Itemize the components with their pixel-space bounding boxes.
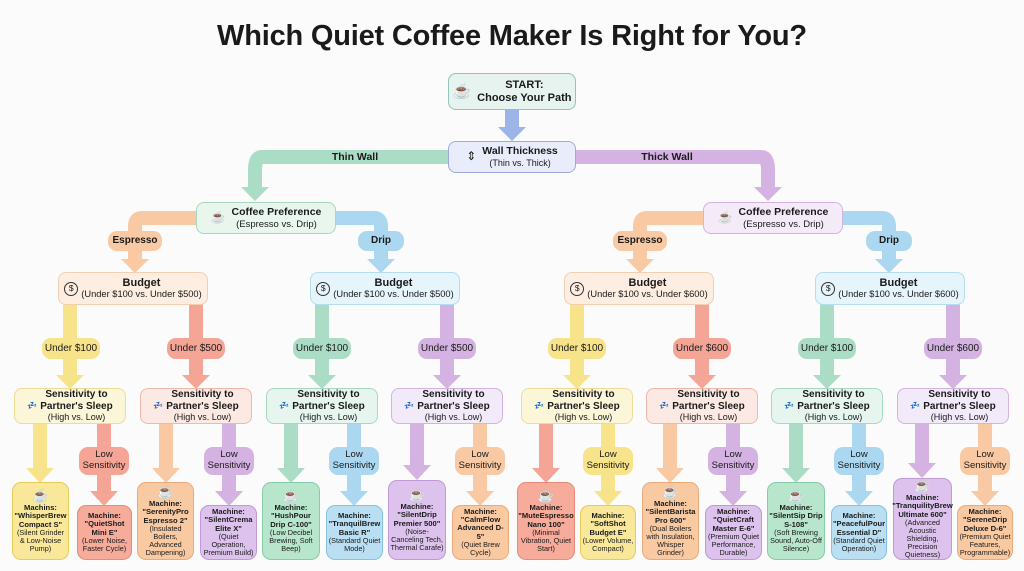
budget box 4: Budget — [880, 277, 917, 289]
sensitivity boxes: 💤 — [279, 401, 289, 410]
machine cards: (Quiet Operation, Premium Build) — [204, 532, 253, 557]
machine cards: "MuteEspresso Nano 100" — [518, 511, 574, 529]
low sensitivity pills: Sensitivity — [83, 460, 125, 471]
sensitivity boxes: Sensitivity to — [171, 389, 234, 400]
coffee preference right — [703, 202, 843, 234]
machine cards — [12, 478, 1013, 560]
machine cards: "SoftShot Budget E" — [590, 519, 626, 537]
pill: drip right: Drip — [879, 235, 899, 246]
sensitivity boxes: Sensitivity to — [422, 389, 485, 400]
machine cards: Machine: — [717, 507, 750, 516]
low sensitivity pills: Sensitivity — [208, 460, 250, 471]
pill: drip left — [358, 231, 404, 251]
machine cards: (Low Decibel Brewing, Soft Beep) — [269, 528, 313, 553]
budget pills: Under $600 — [676, 343, 728, 354]
sensitivity boxes: (High vs. Low) — [931, 412, 988, 422]
sensitivity boxes: Sensitivity to — [928, 389, 991, 400]
budget box 1 — [58, 272, 208, 305]
low sensitivity pills: Low — [471, 449, 489, 460]
machine cards: (Premium Quiet Features, Programmable) — [959, 532, 1011, 557]
branch label: thin wall: Thin Wall — [332, 151, 378, 163]
machine cards: ☕ — [538, 488, 554, 503]
low sensitivity pills: Sensitivity — [587, 460, 629, 471]
sensitivity boxes: Partner's Sleep — [923, 401, 996, 412]
machine cards: (Standard Quiet Operation) — [833, 536, 885, 553]
sensitivity boxes: 💤 — [659, 401, 669, 410]
machine cards: Machine: — [149, 499, 182, 508]
budget pills: Under $100 — [296, 343, 348, 354]
machine cards: ☕ — [409, 487, 425, 502]
machine cards: "CalmFlow Advanced D-5" — [457, 515, 504, 541]
pill: espresso left — [108, 231, 162, 251]
coffee preference left — [196, 202, 336, 234]
budget box 4 — [815, 272, 965, 305]
low sensitivity pills: Sensitivity — [333, 460, 375, 471]
coffee preference right: ☕ — [718, 210, 733, 224]
start box: START: — [505, 79, 543, 91]
machine cards: (Lower Noise, Faster Cycle) — [82, 536, 127, 553]
machine cards: "HushPour Drip C-100" — [270, 511, 312, 529]
sensitivity boxes: Partner's Sleep — [292, 401, 365, 412]
machine cards: ☕ — [662, 484, 679, 499]
low sensitivity pills: Low — [599, 449, 617, 460]
machine cards: Machine: — [654, 499, 687, 508]
machine cards: "SerenityPro Espresso 2" — [142, 507, 189, 525]
machine cards: (Dual Boilers with Insulation, Whisper Grinder) — [646, 524, 695, 557]
sensitivity boxes: (High vs. Low) — [300, 412, 357, 422]
machine cards: Machins: — [24, 503, 57, 512]
sensitivity boxes: Sensitivity to — [677, 389, 740, 400]
pill: drip left: Drip — [371, 235, 391, 246]
sensitivity boxes: (High vs. Low) — [805, 412, 862, 422]
machine cards: (Standard Quiet Mode) — [329, 536, 380, 553]
machine cards: (Lower Volume, Compact) — [583, 536, 633, 553]
coffee preference left: (Espresso vs. Drip) — [236, 219, 317, 230]
machine cards: "SilentSip Drip S-108" — [769, 511, 823, 529]
title: Which Quiet Coffee Maker Is Right for You? — [217, 20, 807, 52]
sensitivity boxes: Sensitivity to — [552, 389, 615, 400]
budget box 2: (Under $100 vs. Under $500) — [333, 289, 454, 299]
budget box 3: $ — [575, 283, 580, 293]
machine cards: ☕ — [788, 488, 804, 503]
low sensitivity pills: Low — [976, 449, 994, 460]
budget box 1: $ — [69, 283, 74, 293]
low sensitivity pills: Low — [95, 449, 113, 460]
low sensitivity pills: Sensitivity — [459, 460, 501, 471]
machine cards: ☕ — [914, 478, 931, 493]
machine cards: (Quiet Brew Cycle) — [461, 540, 500, 557]
machine cards: (Soft Brewing Sound, Auto-Off Silence) — [770, 528, 822, 553]
pill: espresso left: Espresso — [112, 235, 158, 246]
budget pills — [42, 338, 982, 359]
low sensitivity pills: Sensitivity — [964, 460, 1006, 471]
machine cards: Machine: — [906, 493, 939, 502]
machine cards: Machine: — [464, 507, 497, 516]
budget box 4: (Under $100 vs. Under $600) — [838, 289, 959, 299]
sensitivity boxes: Partner's Sleep — [40, 401, 113, 412]
wall thickness box — [448, 141, 576, 173]
budget box 3 — [564, 272, 714, 305]
sensitivity boxes: 💤 — [153, 401, 163, 410]
start box: ☕ — [452, 83, 471, 100]
machine cards: Machine: — [401, 502, 433, 511]
sensitivity boxes: 💤 — [534, 401, 544, 410]
machine cards: Machine: — [338, 511, 371, 520]
budget box 3: Budget — [629, 277, 666, 289]
machine cards: ☕ — [157, 484, 174, 499]
machine cards: Machine: — [780, 503, 812, 512]
machine cards: ☕ — [32, 488, 49, 503]
sensitivity boxes: (High vs. Low) — [174, 412, 231, 422]
machine cards: "PeacefulPour Essential D" — [833, 519, 885, 537]
machine cards: Machine: — [530, 503, 562, 512]
machine cards: "SilentCrema Elite X" — [205, 515, 252, 533]
machine cards: "QuietShot Mini E" — [85, 519, 124, 537]
machine cards: (Minimal Vibration, Quiet Start) — [521, 528, 571, 553]
sensitivity boxes: Partner's Sleep — [547, 401, 620, 412]
sensitivity boxes: (High vs. Low) — [555, 412, 612, 422]
sensitivity boxes: Partner's Sleep — [797, 401, 870, 412]
machine cards: "SilentBarista Pro 600" — [645, 507, 696, 525]
start box: Choose Your Path — [477, 92, 572, 104]
coffee preference right: Coffee Preference — [739, 206, 828, 218]
wall thickness box: (Thin vs. Thick) — [489, 158, 551, 168]
budget box 3: (Under $100 vs. Under $600) — [587, 289, 708, 299]
budget box 1: (Under $100 vs. Under $500) — [81, 289, 202, 299]
budget pills: Under $100 — [551, 343, 603, 354]
machine cards: Machine: — [969, 507, 1001, 516]
coffee preference left: ☕ — [211, 210, 226, 224]
machine cards: "WhisperBrew Compact S" — [14, 511, 67, 529]
budget pills: Under $500 — [421, 343, 473, 354]
machine cards: "TranquilityBrew Ultimate 600" — [892, 501, 953, 519]
budget box 2 — [310, 272, 460, 305]
machine cards: (Silent Grinder & Low-Noise Pump) — [17, 528, 64, 553]
low sensitivity pills: Low — [345, 449, 363, 460]
machine cards: (Advanced Acoustic Shielding, Precision Quietness) — [905, 518, 940, 559]
budget pills: Under $100 — [801, 343, 853, 354]
budget box 2: $ — [321, 283, 326, 293]
sensitivity boxes: 💤 — [27, 401, 37, 410]
machine cards: "SereneDrip Deluxe D-6" — [963, 515, 1007, 533]
pill: drip right — [866, 231, 912, 251]
sensitivity boxes: Partner's Sleep — [417, 401, 490, 412]
coffee preference left: Coffee Preference — [232, 206, 321, 218]
sensitivity boxes: (High vs. Low) — [425, 412, 482, 422]
low sensitivity pills: Sensitivity — [838, 460, 880, 471]
low sensitivity pills: Low — [850, 449, 868, 460]
coffee preference right: (Espresso vs. Drip) — [743, 219, 824, 230]
budget box 4: $ — [826, 283, 831, 293]
machine cards: Machine: — [592, 511, 624, 520]
low sensitivity pills: Sensitivity — [712, 460, 754, 471]
machine cards: (Noise-Canceling Tech, Thermal Carafe) — [390, 527, 444, 552]
sensitivity boxes: Sensitivity to — [45, 389, 108, 400]
branch label: thick wall: Thick Wall — [641, 151, 693, 163]
machine cards: "SilentDrip Premier 500" — [394, 510, 440, 528]
low sensitivity pills: Low — [724, 449, 742, 460]
machine cards: Machine: — [843, 511, 875, 520]
machine cards: Machine: — [212, 507, 245, 516]
machine cards: (Premium Quiet Performance, Durable) — [708, 532, 759, 557]
machine cards: (Insulated Boilers, Advanced Dampening) — [146, 524, 185, 557]
machine cards: Machine: — [88, 511, 121, 520]
sensitivity boxes: (High vs. Low) — [680, 412, 737, 422]
budget pills: Under $600 — [927, 343, 979, 354]
low sensitivity pills — [79, 447, 1010, 475]
machine cards: Machine: — [275, 503, 307, 512]
sensitivity boxes: Partner's Sleep — [166, 401, 239, 412]
sensitivity boxes: Partner's Sleep — [672, 401, 745, 412]
sensitivity boxes: 💤 — [910, 401, 920, 410]
sensitivity boxes: Sensitivity to — [297, 389, 360, 400]
budget box 2: Budget — [375, 277, 412, 289]
sensitivity boxes: 💤 — [404, 401, 414, 410]
pill: espresso right: Espresso — [617, 235, 663, 246]
budget pills: Under $500 — [170, 343, 222, 354]
machine cards: "TranquilBrew Basic R" — [329, 519, 380, 537]
machine cards: ☕ — [283, 488, 299, 503]
budget pills: Under $100 — [45, 343, 97, 354]
sensitivity boxes: Sensitivity to — [802, 389, 865, 400]
low sensitivity pills: Low — [220, 449, 238, 460]
pill: espresso right — [613, 231, 667, 251]
wall thickness box: ⇕ — [466, 149, 476, 163]
sensitivity boxes: 💤 — [784, 401, 794, 410]
start box — [448, 73, 576, 110]
machine cards: "QuietCraft Master E-6" — [712, 515, 754, 533]
budget box 1: Budget — [123, 277, 160, 289]
wall thickness box: Wall Thickness — [482, 145, 558, 157]
sensitivity boxes: (High vs. Low) — [48, 412, 105, 422]
